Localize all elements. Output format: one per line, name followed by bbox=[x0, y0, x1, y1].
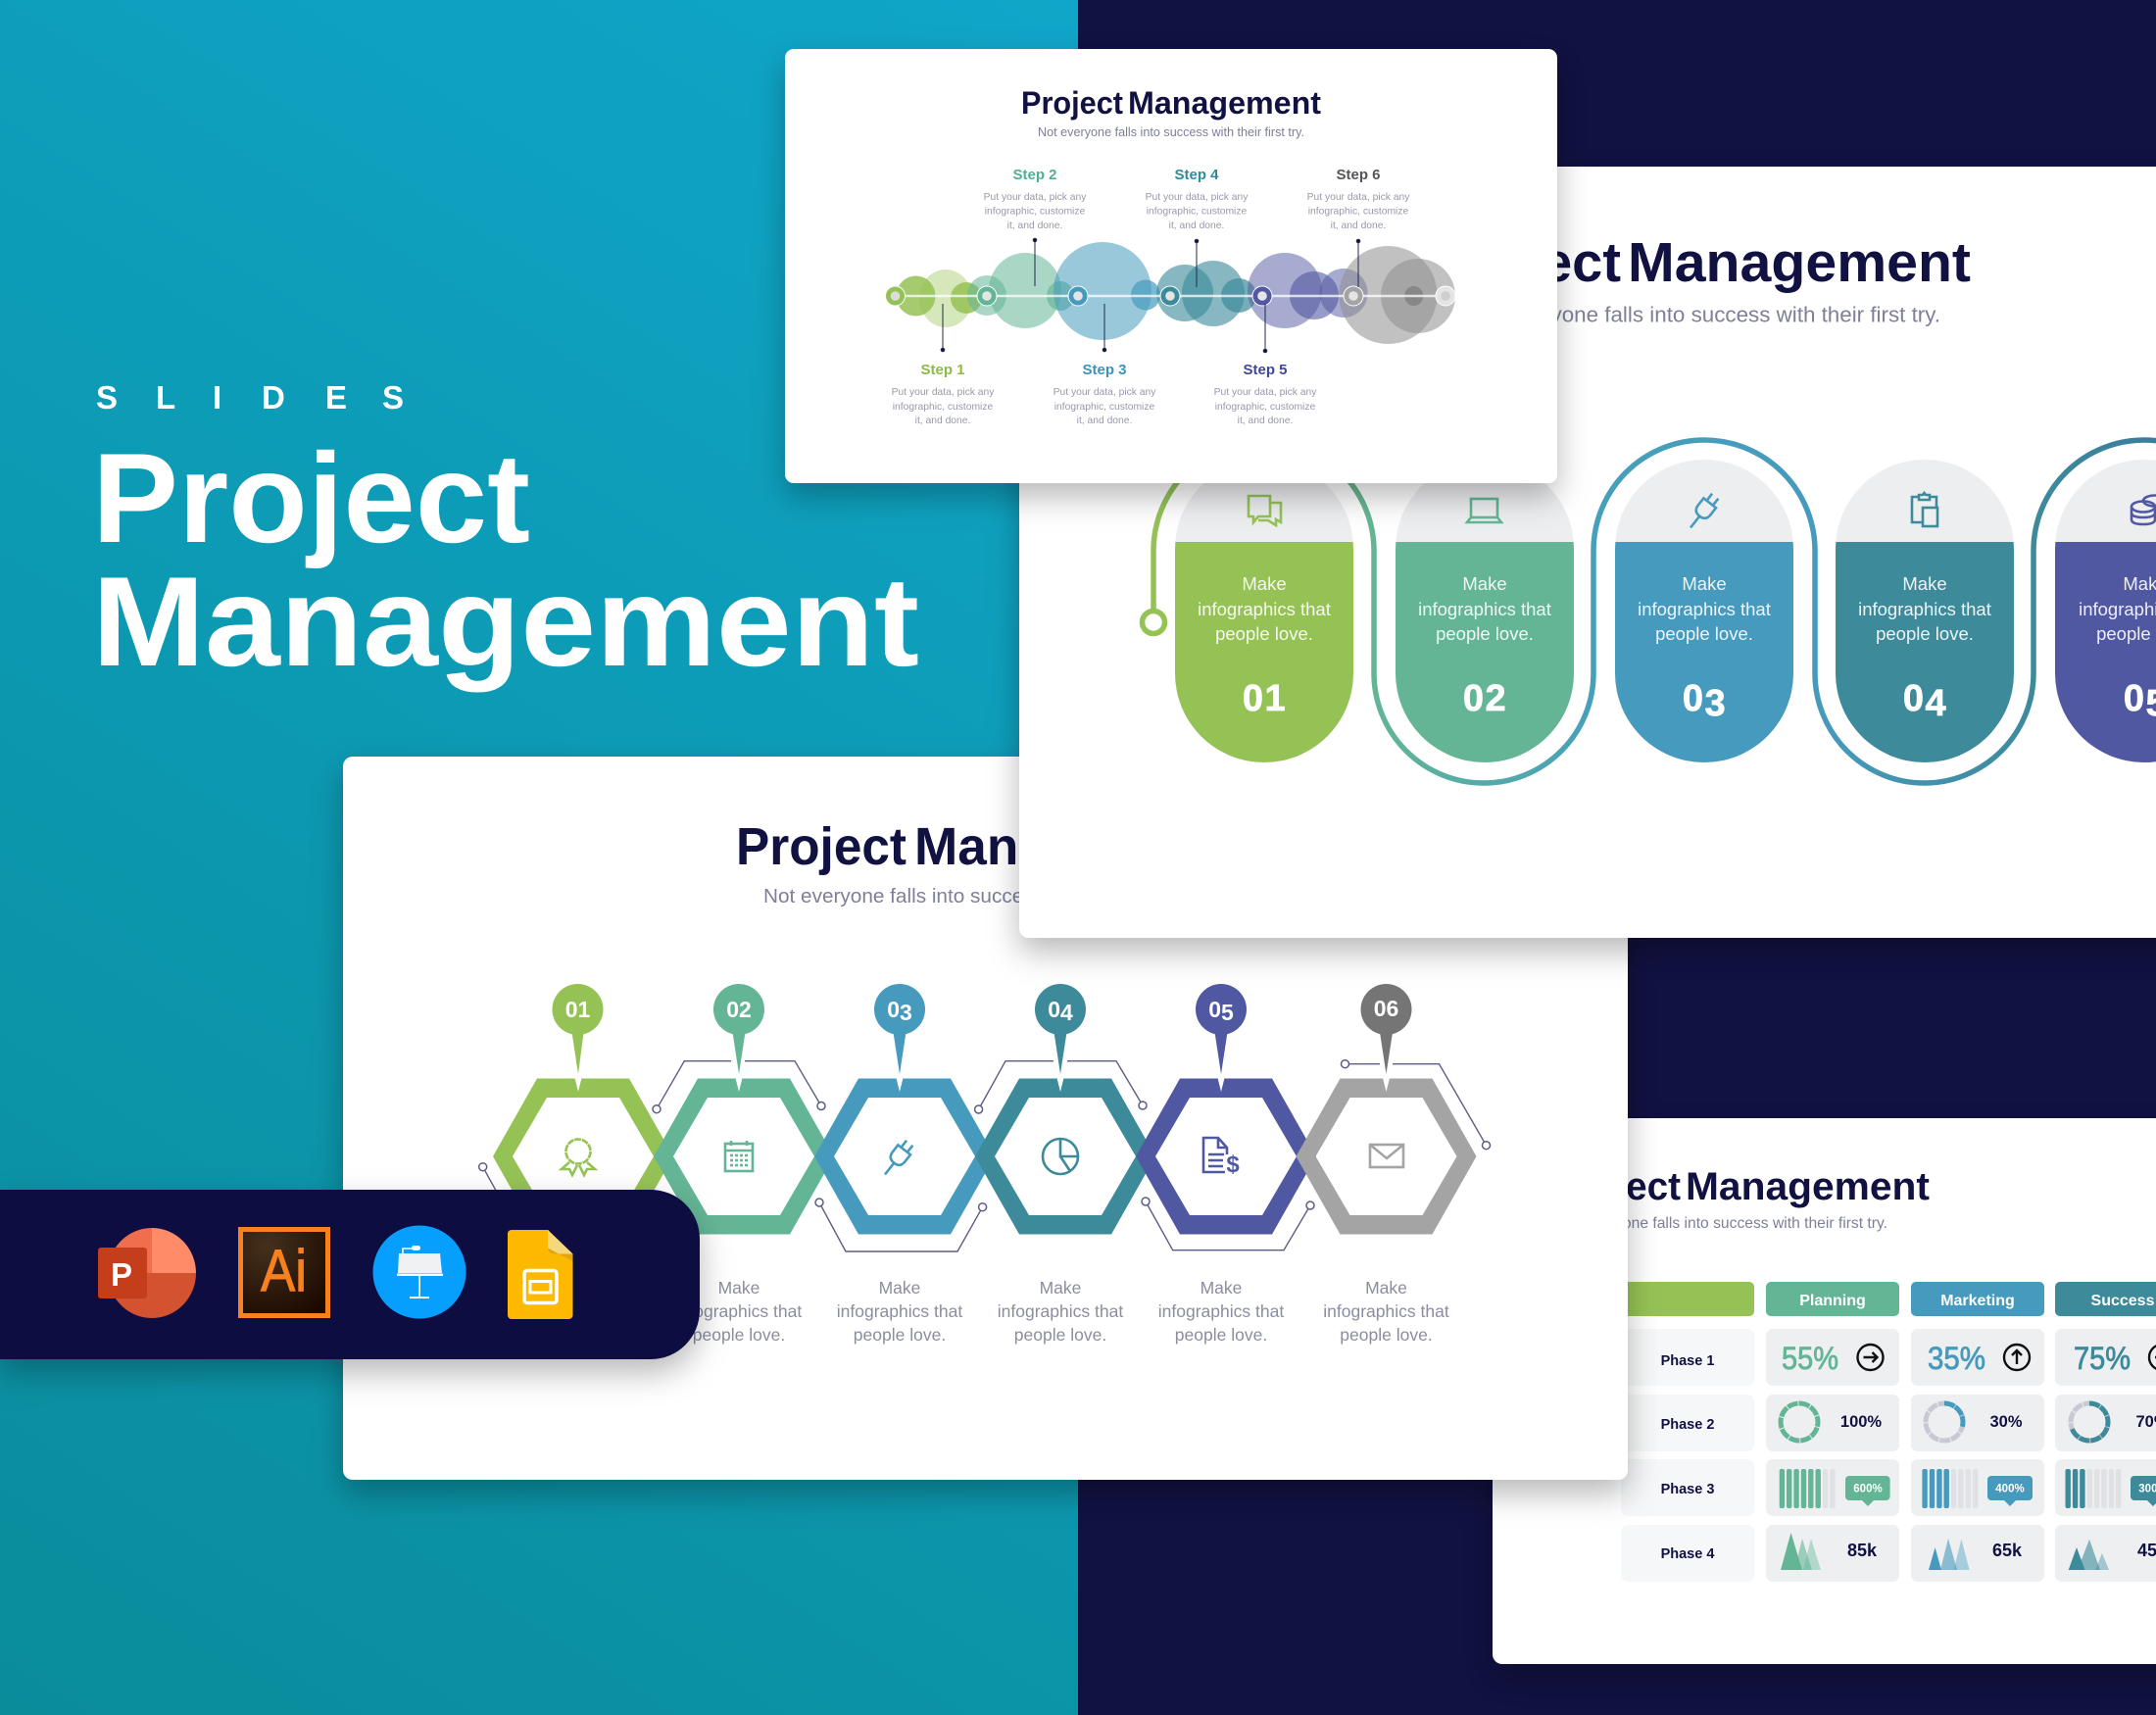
pill 04: people love. bbox=[1876, 623, 1974, 644]
phase 2 progress rings: 100% bbox=[1840, 1413, 1882, 1431]
main title: Project bbox=[92, 426, 530, 569]
phase 4 triangle charts and values bbox=[1781, 1533, 2156, 1570]
pill 01 bbox=[1175, 460, 1353, 762]
pin 01: 01 bbox=[565, 997, 590, 1022]
background: teal left half bbox=[0, 0, 1078, 1715]
pill 03: infographics that bbox=[1638, 599, 1771, 619]
icon: powerpoint bbox=[98, 1228, 196, 1318]
pin 03: 0 bbox=[887, 997, 900, 1022]
step 5 label: Step 5 bbox=[1243, 362, 1288, 378]
timeline axis bbox=[895, 295, 1446, 297]
step 1 label: Step 1 bbox=[920, 362, 965, 378]
step 6 label: it, and done. bbox=[1331, 220, 1386, 231]
icon: powerpoint: P bbox=[111, 1256, 132, 1293]
pill 01: infographics that bbox=[1198, 599, 1331, 619]
phase 2 progress rings bbox=[1781, 1403, 2156, 1441]
connector lines bbox=[479, 1060, 1491, 1251]
icon: pie chart bbox=[1043, 1139, 1078, 1174]
pin 02: 02 bbox=[726, 997, 752, 1022]
panel: hexagon slide bbox=[343, 757, 1628, 1480]
icon: laptop bbox=[1467, 499, 1501, 522]
pill 01: Make bbox=[1242, 573, 1287, 594]
pill 02: 02 bbox=[1463, 678, 1507, 719]
hexagon 03 bbox=[814, 1076, 995, 1235]
phase 3 bar meters and tags bbox=[1780, 1469, 2156, 1508]
pin 05 bbox=[1196, 984, 1247, 1074]
icon: calendar bbox=[725, 1141, 753, 1171]
slide card bbox=[343, 757, 1628, 1480]
main title: Management bbox=[92, 550, 919, 693]
table header row bbox=[1621, 1282, 2156, 1316]
pill 04: 0 bbox=[1903, 678, 1925, 719]
leader lines bbox=[941, 238, 1360, 353]
hexagon captions: people love. bbox=[693, 1325, 785, 1345]
slide heading: Management bbox=[1686, 1165, 1930, 1208]
step 4 label: Step 4 bbox=[1174, 167, 1219, 183]
hexagon 05 bbox=[1136, 1076, 1316, 1235]
pill 02: infographics that bbox=[1418, 599, 1551, 619]
pin 05: 5 bbox=[1221, 1000, 1234, 1025]
hexagon captions bbox=[514, 1278, 1449, 1345]
step 4 label: Put your data, pick any bbox=[1146, 192, 1249, 203]
step 5 label: Put your data, pick any bbox=[1214, 387, 1317, 398]
table header row: Planning bbox=[1799, 1293, 1866, 1309]
phase labels column bbox=[1621, 1329, 1754, 1582]
slide subtitle: Not everyone falls into success with their first try. bbox=[1468, 302, 1940, 327]
pill 03: people love. bbox=[1655, 623, 1753, 644]
step 2 label: Put your data, pick any bbox=[984, 192, 1087, 203]
slide card bbox=[1019, 167, 2156, 938]
hexagon captions: people love. bbox=[1175, 1325, 1267, 1345]
step 6 label: infographic, customize bbox=[1308, 206, 1408, 218]
phase 1 percentages and arrows: 35% bbox=[1928, 1341, 1985, 1376]
panel: bubble timeline slide bbox=[785, 49, 1557, 483]
hexagon captions: Make bbox=[879, 1278, 920, 1298]
hexagon captions: Make bbox=[1040, 1278, 1081, 1298]
pill 01: people love. bbox=[1215, 623, 1313, 644]
number pins bbox=[553, 984, 1411, 1074]
slide heading: Project bbox=[1552, 1165, 1681, 1208]
step 2 label: it, and done. bbox=[1007, 220, 1062, 231]
phase 1 percentages and arrows: 75% bbox=[2074, 1341, 2131, 1376]
slide heading: Project bbox=[1021, 85, 1123, 121]
hexagon captions: Make bbox=[557, 1278, 598, 1298]
step 5 label bbox=[1214, 362, 1317, 426]
hexagon captions: Make bbox=[1365, 1278, 1407, 1298]
step 1 label: it, and done. bbox=[915, 416, 970, 426]
slide card bbox=[785, 49, 1557, 483]
pin 05: 0 bbox=[1208, 997, 1221, 1022]
pill 05 bbox=[2055, 460, 2156, 762]
step 4 label bbox=[1146, 167, 1249, 231]
pill 02 bbox=[1396, 460, 1574, 762]
pill 02: Make bbox=[1462, 573, 1507, 594]
pin 04: 0 bbox=[1048, 997, 1060, 1022]
pin 01 bbox=[553, 984, 604, 1074]
step 3 label: it, and done. bbox=[1077, 416, 1132, 426]
hexagon captions: Make bbox=[1200, 1278, 1242, 1298]
pill 03: Make bbox=[1682, 573, 1727, 594]
icon: coins bbox=[2132, 496, 2156, 524]
hexagon captions: people love. bbox=[1340, 1325, 1433, 1345]
step 3 label: infographic, customize bbox=[1054, 402, 1154, 413]
eyebrow: slides: SLIDES bbox=[96, 379, 404, 416]
phase 4 triangle charts and values: 85k bbox=[1847, 1541, 1878, 1560]
table header row: Marketing bbox=[1940, 1293, 2015, 1309]
panel: table slide bbox=[1493, 1118, 2156, 1664]
slide subtitle: Not everyone falls into success with their first try. bbox=[1557, 1215, 1887, 1232]
pin 04: 4 bbox=[1060, 1000, 1073, 1025]
hexagon captions: infographics that bbox=[1158, 1301, 1284, 1321]
step 1 label: infographic, customize bbox=[893, 402, 993, 413]
pill 04 bbox=[1836, 460, 2014, 762]
step 3 label: Step 3 bbox=[1082, 362, 1127, 378]
pill 03: 0 bbox=[1683, 678, 1705, 719]
phase 1 percentages and arrows: 55% bbox=[1782, 1341, 1838, 1376]
icon: envelope bbox=[1370, 1145, 1403, 1167]
step 5 label: it, and done. bbox=[1238, 416, 1293, 426]
step 4 label: it, and done. bbox=[1169, 220, 1224, 231]
phase labels column: Phase 3 bbox=[1661, 1482, 1714, 1497]
step 2 label: Step 2 bbox=[1012, 167, 1057, 183]
pill 01: 01 bbox=[1243, 678, 1287, 719]
icon: illustrator bbox=[241, 1229, 327, 1315]
step 4 label: infographic, customize bbox=[1147, 206, 1247, 218]
step 5 label: infographic, customize bbox=[1215, 402, 1315, 413]
step 6 label: Put your data, pick any bbox=[1307, 192, 1410, 203]
hexagon 02 bbox=[654, 1076, 834, 1235]
table header row: Success bbox=[2091, 1293, 2155, 1309]
winding outline path bbox=[1143, 440, 2156, 783]
panel: pill slide bbox=[1019, 167, 2156, 938]
hexagon captions: infographics that bbox=[1323, 1301, 1449, 1321]
phase labels column: Phase 4 bbox=[1661, 1546, 1714, 1562]
phase 3 bar meters and tags: 600% bbox=[1853, 1484, 1883, 1495]
icon: award ribbon bbox=[562, 1139, 595, 1175]
hexagon 04 bbox=[975, 1076, 1155, 1235]
slide heading: Management bbox=[914, 817, 1233, 876]
hexagon captions: people love. bbox=[1014, 1325, 1106, 1345]
phase 2 progress rings: 30% bbox=[1989, 1413, 2023, 1431]
icon: illustrator: Ai bbox=[261, 1238, 307, 1303]
hexagon captions: Make bbox=[718, 1278, 760, 1298]
pill 04: 4 bbox=[1925, 683, 1947, 724]
icon: plug bbox=[1685, 491, 1722, 532]
icon: document with dollar: $ bbox=[1226, 1152, 1240, 1178]
slide subtitle: Not everyone falls into success with their first try. bbox=[1038, 125, 1304, 139]
hexagon captions: people love. bbox=[531, 1325, 623, 1345]
hexagon captions: infographics that bbox=[514, 1301, 640, 1321]
phase 1 percentages and arrows bbox=[1782, 1341, 2156, 1376]
pin 03 bbox=[874, 984, 925, 1074]
pin 04 bbox=[1035, 984, 1086, 1074]
pin 06: 06 bbox=[1374, 996, 1398, 1021]
slide heading: Project bbox=[736, 817, 906, 876]
phase labels column: Phase 1 bbox=[1661, 1353, 1714, 1369]
step 2 label: infographic, customize bbox=[985, 206, 1085, 218]
hexagon captions: people love. bbox=[854, 1325, 946, 1345]
slide subtitle: Not everyone falls into success with their first try. bbox=[763, 886, 1201, 907]
table cell backgrounds bbox=[1766, 1329, 2156, 1582]
pill 03: 3 bbox=[1705, 683, 1727, 724]
pill 02: people love. bbox=[1436, 623, 1534, 644]
step 1 label bbox=[892, 362, 995, 426]
hexagon 01 bbox=[493, 1076, 673, 1235]
icon: keynote bbox=[372, 1225, 466, 1319]
icon: chat bubbles bbox=[1249, 496, 1281, 525]
pin 03: 3 bbox=[900, 1000, 912, 1025]
slide heading: Management bbox=[1128, 85, 1321, 121]
step 2 label bbox=[984, 167, 1087, 231]
step 6 label bbox=[1307, 167, 1410, 231]
hexagon captions: infographics that bbox=[676, 1301, 802, 1321]
pill 04: infographics that bbox=[1858, 599, 1991, 619]
bubble chart bbox=[896, 242, 1455, 344]
icon: plug bbox=[879, 1138, 916, 1179]
pill 04: Make bbox=[1902, 573, 1947, 594]
pill 03 bbox=[1615, 460, 1793, 762]
pin 02 bbox=[713, 984, 764, 1074]
phase 4 triangle charts and values: 65k bbox=[1992, 1541, 2023, 1560]
step 3 label bbox=[1054, 362, 1156, 426]
slide heading: Project bbox=[1435, 231, 1621, 294]
icon: document with dollar bbox=[1203, 1138, 1240, 1178]
hexagon chain bbox=[493, 1076, 1476, 1235]
heading block: slides project management bbox=[92, 379, 919, 693]
step 1 label: Put your data, pick any bbox=[892, 387, 995, 398]
pin 06 bbox=[1360, 984, 1411, 1074]
phase labels column: Phase 2 bbox=[1661, 1417, 1714, 1433]
pill 05: 0 bbox=[2124, 678, 2146, 719]
hexagon captions: infographics that bbox=[837, 1301, 962, 1321]
step 3 label: Put your data, pick any bbox=[1054, 387, 1156, 398]
step 6 label: Step 6 bbox=[1336, 167, 1381, 183]
hexagon captions: infographics that bbox=[998, 1301, 1123, 1321]
slide heading: Management bbox=[1628, 231, 1971, 294]
phase 3 bar meters and tags: 400% bbox=[1995, 1484, 2025, 1495]
icon: google slides bbox=[508, 1230, 572, 1319]
hexagon 06 bbox=[1296, 1076, 1476, 1235]
timeline nodes bbox=[886, 286, 1455, 306]
bar background bbox=[0, 1190, 700, 1359]
slide card bbox=[1493, 1118, 2156, 1664]
icon: clipboard bbox=[1912, 493, 1937, 526]
panel: software icons bar bbox=[0, 1190, 700, 1359]
